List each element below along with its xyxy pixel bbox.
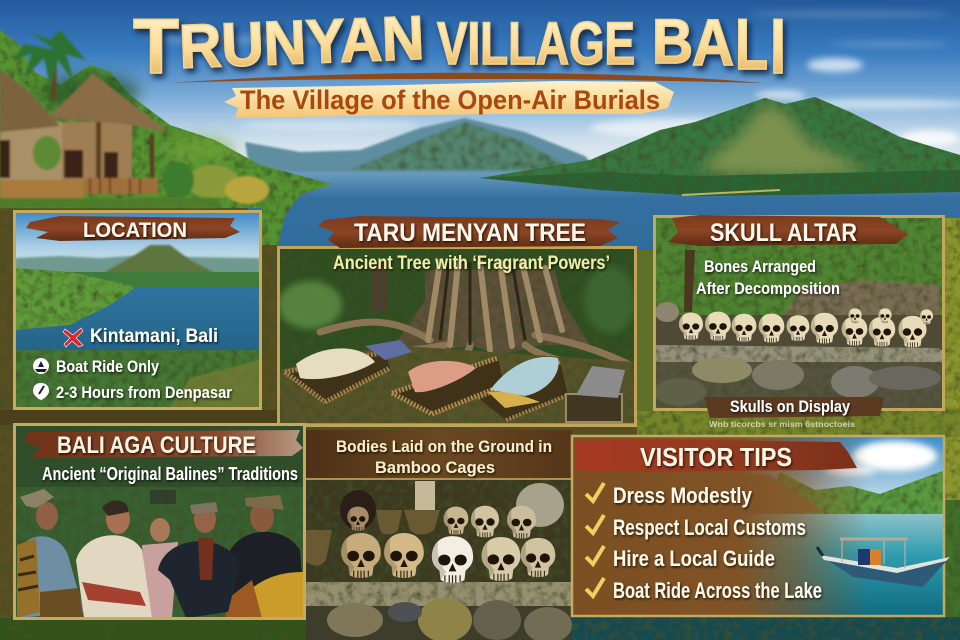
tip: respect customs: Respect Local Customs [613, 515, 806, 540]
background: hillside shading [40, 74, 236, 164]
panel: taru menyan tree [277, 216, 637, 427]
culture subtitle: Ancient “Original Balines” Traditions [42, 464, 298, 484]
illustration: thatched huts [0, 70, 220, 208]
tip: respect customs [586, 515, 806, 540]
skull pile scene [306, 480, 572, 640]
skull group [341, 506, 555, 583]
small faded caption: Wnb ticorcbs sr mism 6stnoctoeis [709, 419, 855, 429]
location marker row: Kintamani, Bali [90, 326, 218, 347]
altar caption [696, 257, 840, 298]
travel time row: 2-3 Hours from Denpasar [56, 383, 232, 402]
panel: bali aga culture [13, 423, 306, 620]
villager 3 [142, 518, 178, 618]
ceremonial bowls [306, 510, 440, 566]
title underline stroke [168, 73, 762, 83]
panel: bodies caption and skull pile [306, 430, 572, 640]
title: I [770, 2, 786, 90]
altar caption: Bones Arranged [704, 257, 816, 276]
bamboo cage 3 [478, 357, 568, 420]
title: VILLAGE [437, 10, 635, 77]
background: clouds [150, 11, 960, 146]
villager 4 [158, 502, 240, 618]
title: B [652, 7, 693, 77]
dark hair skull [340, 490, 376, 530]
tree scene image [278, 248, 636, 423]
culture banner: BALI AGA CULTURE [57, 432, 256, 459]
title: T [133, 2, 179, 90]
caption band: Bodies Laid on the Ground in [336, 437, 552, 456]
panel: visitor tips [571, 435, 950, 617]
villager 2 [76, 501, 152, 618]
tips banner [576, 439, 857, 472]
tree banner: TARU MENYAN TREE [354, 219, 586, 247]
tips scene image [573, 437, 945, 617]
boat ride row: Boat Ride Only [56, 357, 159, 376]
title: L [735, 5, 768, 85]
tip: boat ride [586, 578, 822, 603]
background: large green mountain [480, 97, 960, 196]
background: lake [240, 170, 960, 250]
row of skulls [679, 308, 933, 348]
culture scene image [15, 425, 304, 618]
bamboo cage 2 [392, 358, 504, 414]
title: RUNYAN [178, 4, 425, 82]
tip: dress modestly: Dress Modestly [613, 483, 753, 508]
altar banner: SKULL ALTAR [710, 219, 857, 247]
caption band [306, 430, 572, 481]
panel: location [13, 210, 262, 410]
villager 1 [17, 489, 84, 618]
bamboo cage 1 [285, 340, 412, 402]
tip: boat ride: Boat Ride Across the Lake [613, 578, 822, 603]
altar scene image [654, 217, 943, 410]
bamboo cage 4 [566, 366, 625, 422]
villager 5 [226, 495, 304, 618]
tip: hire guide: Hire a Local Guide [613, 546, 775, 571]
background: distant mountain [245, 118, 600, 172]
subtitle ribbon: The Village of the Open-Air Burials [240, 85, 660, 115]
background: sky [0, 0, 960, 175]
skulls on display plaque: Skulls on Display [730, 397, 850, 416]
location banner [26, 216, 240, 242]
title: A [692, 5, 734, 79]
altar banner [668, 215, 908, 247]
caption band: Bamboo Cages [375, 458, 495, 477]
panel: skull altar [653, 215, 945, 429]
location scene image [15, 212, 260, 410]
background: lower jungle and earth [0, 205, 960, 640]
background: jungle hillside [0, 30, 332, 245]
icon: boat [817, 539, 950, 587]
tree subtitle: Ancient Tree with ‘Fragrant Powers’ [333, 253, 610, 274]
icon: bushes on shore [162, 162, 269, 204]
tips banner: VISITOR TIPS [640, 442, 792, 472]
title [133, 2, 786, 90]
altar caption: After Decomposition [696, 279, 840, 298]
location banner: LOCATION [83, 219, 187, 242]
icon: palm tree [14, 30, 86, 100]
